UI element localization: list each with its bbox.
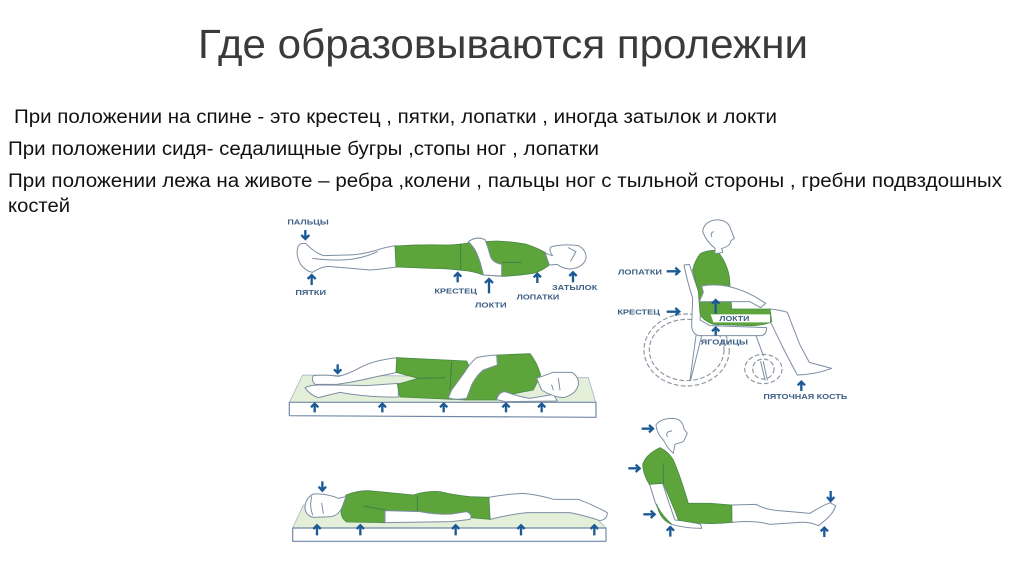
text: lying on back: При положении на спине - это крестец , пятки, лопатки , иногда затылок и локти [14, 107, 777, 128]
text: lying on stomach: При положении лежа на животе – ребра ,колени , пальцы ног с тыльной стороны , гребни подвздошных [8, 171, 1003, 192]
arrows [667, 268, 679, 275]
wheelchair wheels [644, 314, 729, 386]
green hip [657, 504, 672, 524]
figure: sitting in wheelchair: ЛОКТИ [719, 314, 749, 323]
figure: sitting in wheelchair: КРЕСТЕЦ [617, 307, 660, 316]
figure: sitting in wheelchair [617, 220, 848, 401]
chair frame [684, 264, 767, 336]
text block: pressure points by position [8, 107, 1003, 217]
labels: ПАЛЬЦЫ [287, 217, 329, 226]
arm [385, 511, 471, 523]
text: lying on stomach continued: костей [8, 196, 70, 217]
legs [488, 493, 607, 521]
arrows [334, 364, 341, 373]
lower arm [497, 392, 557, 402]
title: Где образовываются пролежни [198, 21, 808, 67]
figure: sitting in wheelchair: ПЯТОЧНАЯ КОСТЬ [763, 392, 848, 401]
arrows [642, 425, 653, 432]
back arm [649, 483, 702, 528]
green clothing [395, 241, 549, 276]
figure: lying on back: ПЯТКИ [295, 288, 326, 297]
leg [770, 309, 832, 375]
arm in front [448, 355, 497, 399]
figure: lying on side [289, 354, 596, 417]
arrows [301, 230, 309, 239]
lower leg and foot [305, 383, 398, 398]
arrows [319, 481, 326, 491]
leg [732, 503, 836, 526]
head and neck [703, 220, 734, 253]
figure: lying on back [287, 217, 598, 310]
labels: ЛОПАТКИ [618, 267, 662, 276]
text: sitting: При положении сидя- седалищные бугры ,стопы ног , лопатки [8, 139, 599, 160]
head [305, 494, 346, 517]
green clothing [643, 448, 732, 524]
mattress [289, 375, 596, 403]
head and neck [656, 418, 687, 453]
legs and feet [297, 243, 396, 272]
figure: lying on back: КРЕСТЕЦ [434, 287, 477, 296]
green clothing [693, 250, 772, 326]
forearm and arm [699, 285, 766, 308]
figure: lying on back: ЛОКТИ [475, 301, 507, 310]
figure: sitting on bed [628, 418, 836, 537]
head [537, 372, 578, 398]
upper leg [312, 358, 397, 384]
head [545, 245, 586, 269]
mattress [293, 505, 606, 528]
elbows label panel [711, 314, 770, 322]
figure: lying on back: ЗАТЫЛОК [552, 283, 598, 292]
figure: lying on stomach [293, 481, 607, 541]
figure: lying on back: ЛОПАТКИ [517, 293, 559, 302]
green clothing [396, 354, 541, 400]
arm [468, 238, 502, 276]
figure: sitting in wheelchair: ЯГОДИЦЫ [701, 337, 748, 346]
green clothing [341, 491, 490, 523]
